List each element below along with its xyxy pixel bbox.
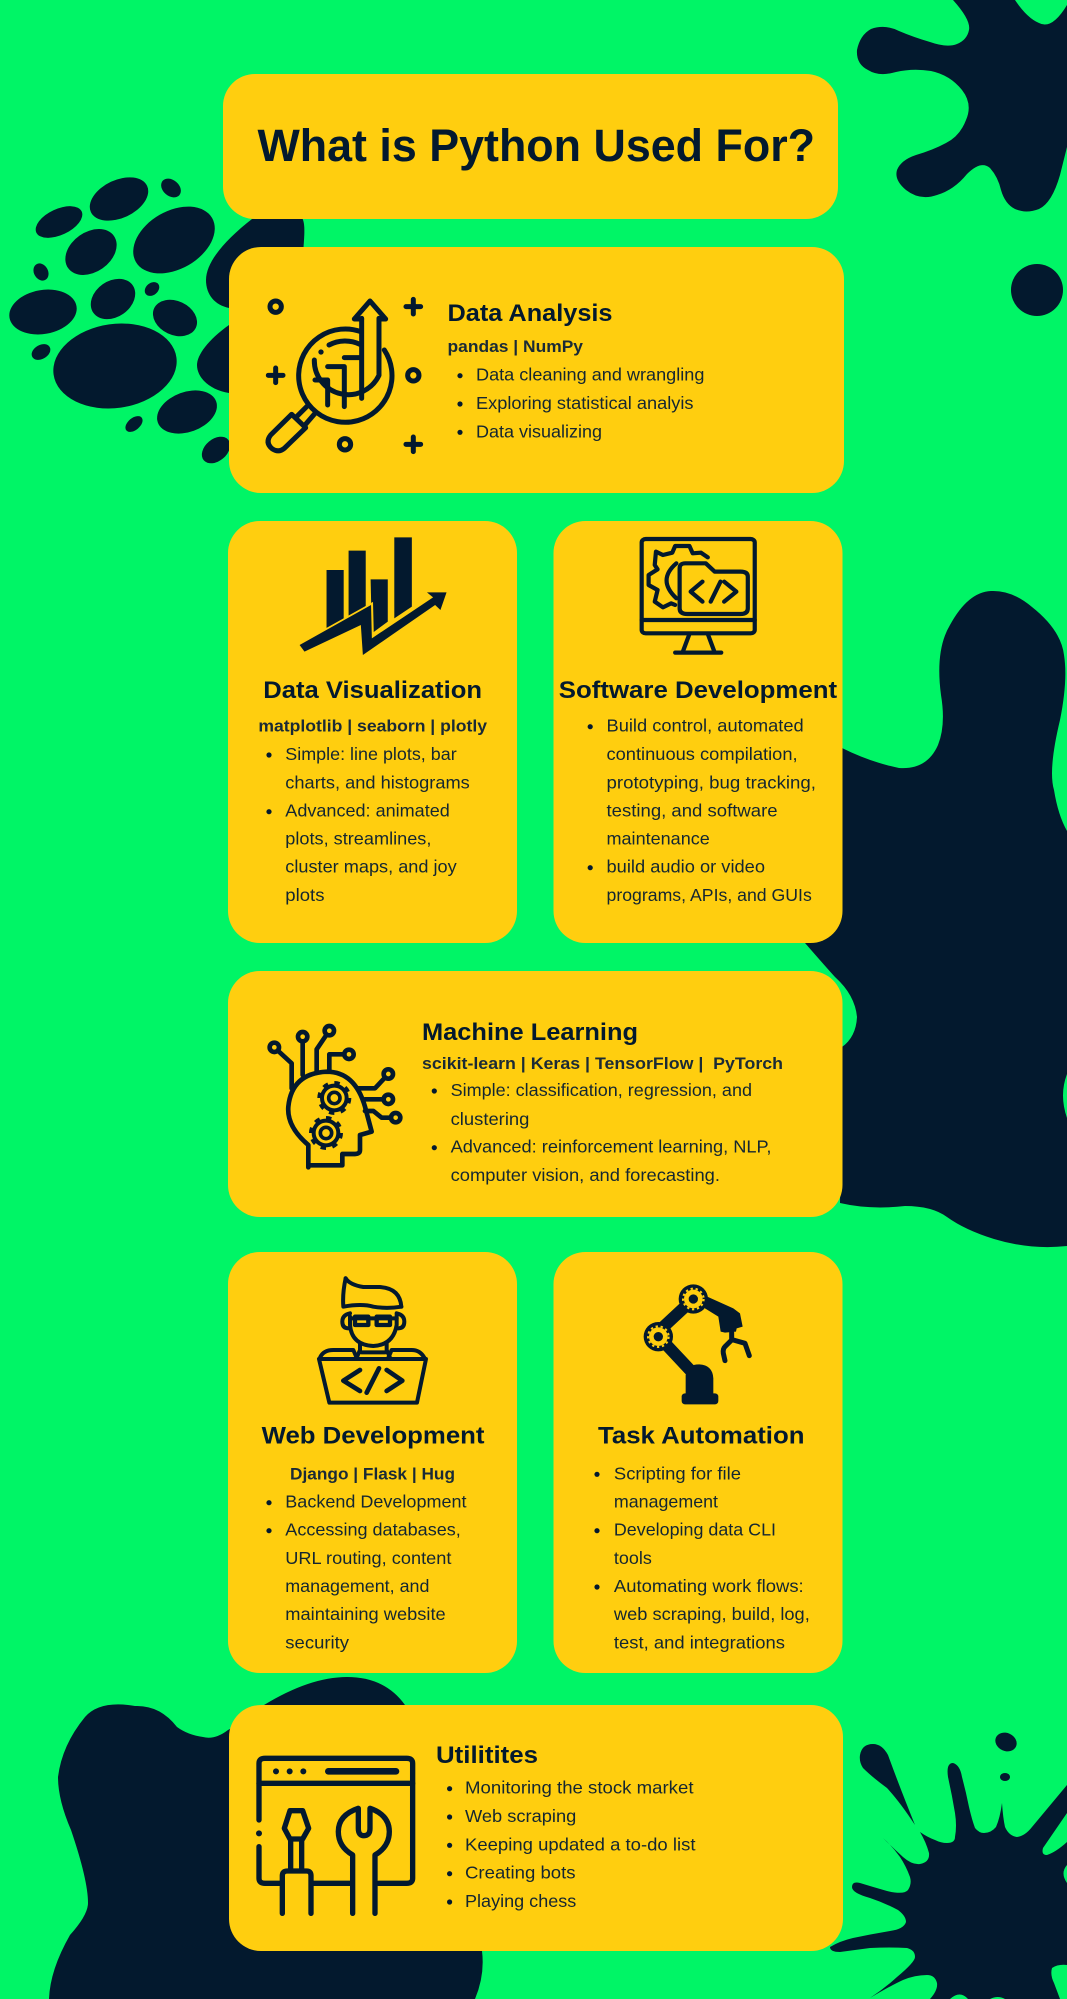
list: machine learning [432,1080,771,1185]
list: task automation: Scripting for file [614,1463,741,1483]
list: task automation: management [614,1492,718,1512]
heading: data visualization: Data Visualization [263,677,482,704]
list: software development: testing, and software [606,801,778,821]
list: utilities: Keeping updated a to-do list [465,1834,696,1854]
icon: bars and rising arrow [300,537,447,655]
list: task automation: tools [614,1548,652,1568]
decoration: top right splat [857,0,1067,316]
heading: utilities: Utilitites [436,1742,538,1769]
panel: task automation [554,1252,842,1673]
libraries: machine learning: scikit-learn | Keras | TensorFlow | PyTorch [422,1054,783,1073]
list: data visualization: cluster maps, and joy [285,857,457,877]
panel: data visualization [228,521,517,943]
heading: task automation: Task Automation [598,1422,804,1449]
list: utilities: Monitoring the stock market [465,1778,694,1798]
list: data visualization: plots, streamlines, [285,828,431,848]
heading: software development: Software Development [559,677,837,704]
panel: machine learning [228,971,842,1217]
list: machine learning: Advanced: reinforcement learning, NLP, [451,1137,771,1157]
heading: data analysis: Data Analysis [448,300,612,327]
heading: web development: Web Development [262,1422,484,1449]
panel: utilities [229,1705,843,1951]
list: software development: maintenance [606,828,710,848]
list: web development: Backend Development [285,1492,467,1512]
list: machine learning: Simple: classification, regression, and [451,1080,752,1100]
list: task automation: Developing data CLI [614,1520,776,1540]
icon: browser window with screwdriver and wrench [256,1758,413,1913]
libraries: data visualization: matplotlib | seaborn | plotly [258,717,488,736]
list: data visualization [266,744,470,905]
list: data analysis: Data visualizing [476,421,602,441]
list: data analysis: Data cleaning and wrangling [476,365,704,385]
icon: monitor with gear and code folder [642,539,755,653]
list: software development: programs, APIs, and GUIs [606,885,812,905]
panel: web development [228,1252,517,1673]
list: software development: continuous compilation, [606,744,798,764]
list: web development: URL routing, content [285,1548,452,1568]
panel: software development [554,521,842,943]
list: data analysis: Exploring statistical analyis [476,393,694,413]
heading: machine learning: Machine Learning [422,1019,638,1046]
list: utilities: Playing chess [465,1891,577,1911]
list: web development: security [285,1632,349,1652]
list: data visualization: charts, and histograms [285,772,470,792]
list: task automation: Automating work flows: [614,1576,804,1596]
list: software development: build audio or video [606,857,765,877]
list: web development [266,1492,467,1652]
icon: developer at laptop [319,1278,426,1403]
list: utilities: Creating bots [465,1863,576,1883]
list: data visualization: Advanced: animated [285,801,450,821]
decoration: bottom right splat [830,1729,1067,1999]
list: machine learning: clustering [451,1109,529,1129]
list: web development: management, and [285,1576,429,1596]
libraries: web development: Django | Flask | Hug [290,1464,455,1483]
list: software development [588,716,816,905]
list: web development: maintaining website [285,1604,446,1624]
list: data visualization: plots [285,885,325,905]
decoration: left pebble cluster [6,169,304,469]
list: machine learning: computer vision, and forecasting. [451,1165,720,1185]
list: data analysis [457,365,704,441]
list: software development: Build control, automated [606,716,804,736]
list: web development: Accessing databases, [285,1520,461,1540]
icon: head with gears and circuit lines [270,1026,400,1167]
list: task automation: web scraping, build, log, [613,1604,810,1624]
list: task automation [594,1463,810,1652]
list: data visualization: Simple: line plots, bar [285,744,457,764]
list: utilities [447,1778,696,1911]
decoration: right large blob [805,591,1067,1247]
list: software development: prototyping, bug tracking, [606,772,816,792]
panel: title [223,74,838,219]
decoration: bottom left blob [49,1677,483,1999]
libraries: data analysis: pandas | NumPy [448,337,584,356]
icon: magnifier with rising chart [268,299,421,452]
list: task automation: test, and integrations [614,1632,785,1652]
icon: robot arm [644,1284,749,1404]
list: utilities: Web scraping [465,1806,576,1826]
panel: data analysis [229,247,844,493]
title: What is Python Used For? [258,120,815,171]
